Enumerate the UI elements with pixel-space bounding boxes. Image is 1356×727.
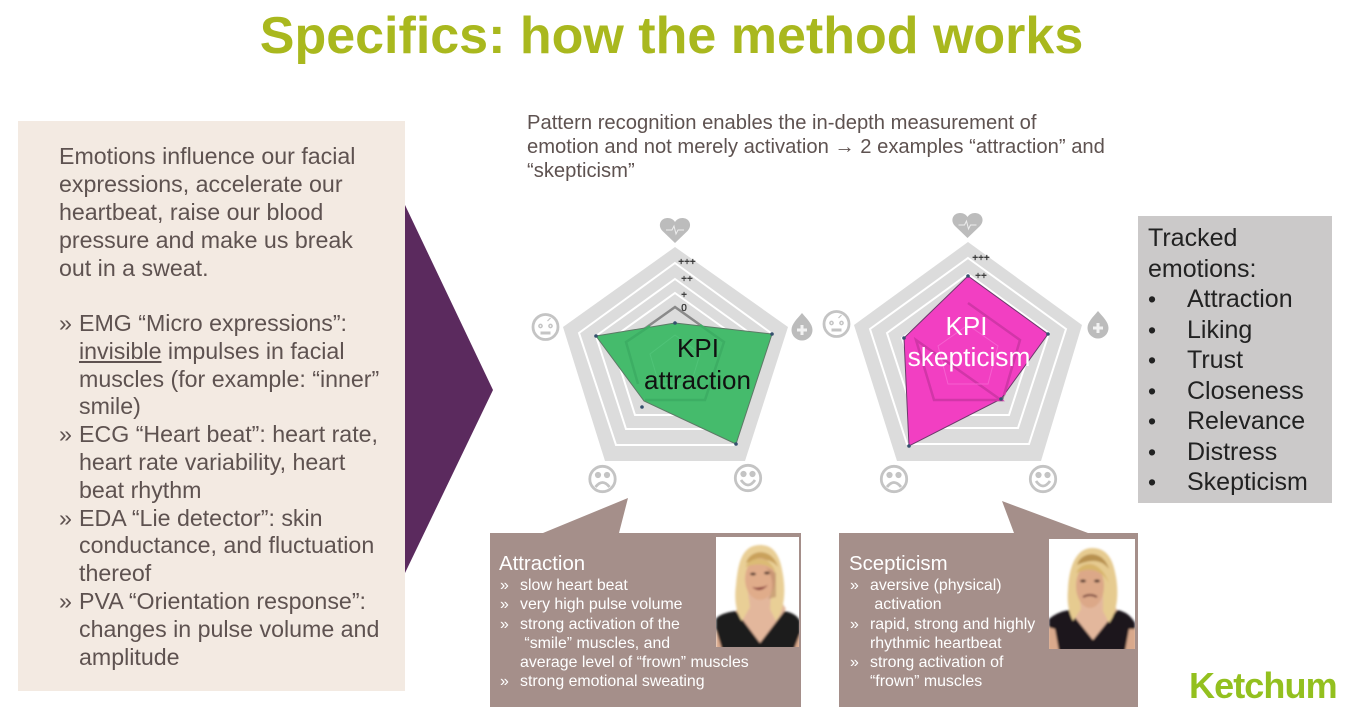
scale labels: ++ xyxy=(975,271,987,282)
icon: heart xyxy=(952,213,983,238)
panel: tracked emotions xyxy=(1138,216,1332,503)
icon: happy face xyxy=(735,465,761,491)
intro text: pattern recognition: “skepticism” xyxy=(527,160,635,182)
callout bullets: » xyxy=(500,673,509,690)
magenta data shape xyxy=(904,276,1048,446)
data points xyxy=(902,274,1050,448)
bullet column: • xyxy=(1148,347,1156,373)
method list: muscles (for example: “inner” xyxy=(79,366,379,392)
callout bullets: » xyxy=(850,577,859,594)
callout list: activation xyxy=(874,596,942,613)
inner grid overlay xyxy=(916,303,1020,400)
callout bullets: » xyxy=(850,616,859,632)
tracked heading: Tracked xyxy=(1148,224,1237,252)
pentagon grid xyxy=(854,242,1082,461)
callout bullets xyxy=(500,577,509,690)
icon: heart xyxy=(660,218,690,243)
callout list: “smile” muscles, and xyxy=(524,635,670,652)
bullet column: • xyxy=(1148,286,1156,312)
scale labels: +++ xyxy=(972,253,990,264)
KPI label: KPI xyxy=(677,333,719,363)
callout list: very high pulse volume xyxy=(520,596,683,613)
bullet column: • xyxy=(1148,316,1156,342)
intro text: out in a sweat. xyxy=(59,255,209,281)
data points xyxy=(594,321,774,446)
icon: neutral face xyxy=(533,314,558,340)
callout list: rapid, strong and highly xyxy=(870,616,1035,632)
method list: PVA “Orientation response”: xyxy=(79,588,366,614)
method list: » xyxy=(59,310,72,336)
intro text xyxy=(59,143,355,281)
icon: drop xyxy=(1088,311,1108,338)
callout bullets: » xyxy=(500,616,509,632)
method list: » xyxy=(59,421,72,447)
tracked heading: emotions: xyxy=(1148,254,1256,282)
emotions list: Closeness xyxy=(1187,376,1304,404)
intro text: pattern recognition: Pattern recognition enables the in-depth measurement of xyxy=(527,112,1036,134)
KPI label line 2: skepticism xyxy=(908,342,1030,372)
callout: scepticism xyxy=(839,501,1138,707)
method list xyxy=(59,310,379,670)
photo: smiling woman xyxy=(716,537,799,647)
icon: neutral face xyxy=(824,312,849,336)
KPI label: KPI xyxy=(946,311,987,341)
method list: EDA “Lie detector”: skin xyxy=(79,505,323,531)
intro text: pressure and make us break xyxy=(59,227,353,253)
intro text: Emotions influence our facial xyxy=(59,143,355,169)
callout list: aversive (physical) xyxy=(870,577,1002,594)
scale labels: +++ xyxy=(678,257,696,268)
callout list: slow heart beat xyxy=(520,577,628,594)
callout list: “frown” muscles xyxy=(870,673,982,690)
bullet column: • xyxy=(1148,408,1156,434)
icon: sad face xyxy=(881,466,907,492)
scale labels: ++ xyxy=(681,274,693,285)
emotions list: Skepticism xyxy=(1187,468,1308,496)
emotions list xyxy=(1187,285,1308,496)
icon: sad face xyxy=(590,466,615,492)
emotions list: Distress xyxy=(1187,438,1277,466)
method list: ECG “Heart beat”: heart rate, xyxy=(79,421,378,447)
callout list: strong emotional sweating xyxy=(520,673,705,690)
callout bullets: » xyxy=(500,577,509,594)
KPI label line 2: attraction xyxy=(644,365,751,395)
emotions list: Liking xyxy=(1187,316,1252,344)
scale labels: 0 xyxy=(681,303,687,314)
emotions list: Relevance xyxy=(1187,407,1305,435)
scale labels xyxy=(678,257,696,314)
callout list: average level of “frown” muscles xyxy=(520,654,749,671)
title: Specifics: how the method works xyxy=(260,7,1083,65)
method list: EMG “Micro expressions”: xyxy=(79,310,347,336)
scale labels: + xyxy=(681,290,687,301)
bullet column: • xyxy=(1148,469,1156,495)
bullet column xyxy=(1148,286,1156,495)
callout bullets xyxy=(850,577,859,671)
intro text: heartbeat, raise our blood xyxy=(59,199,323,225)
method list: thereof xyxy=(79,560,151,586)
callout heading: Attraction xyxy=(499,553,585,575)
method list: invisible impulses in facial xyxy=(79,338,344,364)
intro text: expressions, accelerate our xyxy=(59,171,343,197)
method list: heart rate variability, heart xyxy=(79,449,345,475)
method list: conductance, and fluctuation xyxy=(79,532,374,558)
callout shape xyxy=(839,501,1138,707)
method list: » xyxy=(59,505,72,531)
tracked heading xyxy=(1148,224,1256,282)
callout bullets: » xyxy=(500,596,509,613)
method list: changes in pulse volume and xyxy=(79,616,379,642)
callout list xyxy=(520,577,749,690)
callout bullets: » xyxy=(850,654,859,671)
pentagon grid xyxy=(563,247,788,461)
callout list xyxy=(870,577,1036,690)
intro text: pattern recognition xyxy=(527,112,1105,182)
inner grid overlay xyxy=(626,325,724,400)
callout shape xyxy=(490,498,801,707)
logo: Ketchum: Ketchum xyxy=(1189,665,1337,706)
callout list: rhythmic heartbeat xyxy=(870,635,1002,652)
green data shape xyxy=(596,323,772,444)
intro text: pattern recognition: emotion and not merely activation → 2 examples “attraction” and xyxy=(527,136,1105,158)
icon: drop xyxy=(792,313,812,340)
scale labels xyxy=(972,253,990,282)
photo: frowning woman xyxy=(1049,539,1135,649)
bullet column: • xyxy=(1148,378,1156,404)
method list: » xyxy=(59,588,72,614)
emotions list: Attraction xyxy=(1187,285,1293,313)
emotions list: Trust xyxy=(1187,346,1243,374)
method list: beat rhythm xyxy=(79,477,201,503)
icon: happy face xyxy=(1030,466,1056,492)
panel: emotions explanation xyxy=(18,121,405,691)
callout: attraction xyxy=(490,498,801,707)
method list: smile) xyxy=(79,393,141,419)
method list: amplitude xyxy=(79,644,180,670)
bullet column: • xyxy=(1148,438,1156,464)
callout heading: Scepticism xyxy=(849,553,948,575)
callout list: strong activation of the xyxy=(520,616,680,632)
callout list: strong activation of xyxy=(870,654,1003,671)
